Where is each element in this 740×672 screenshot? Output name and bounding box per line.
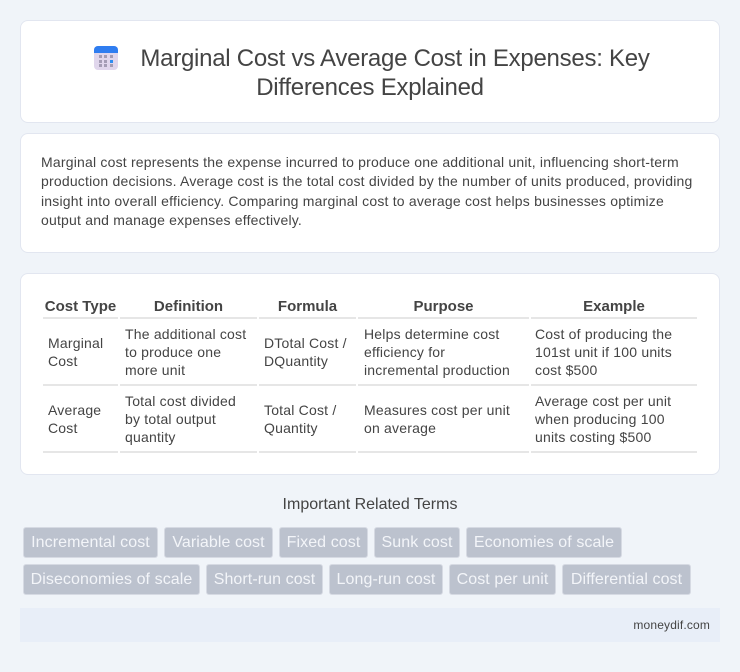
- text: introduction paragraph: production decisions. Average cost is the total cost divided by the number of units produced, providing: [41, 173, 692, 189]
- cell: marginal example: 101st unit if 100 units: [535, 344, 672, 360]
- tag: Diseconomies of scale: [23, 564, 200, 595]
- cell: marginal purpose: [364, 326, 510, 378]
- tag: Fixed cost: Fixed cost: [287, 534, 360, 551]
- tag: Cost per unit: Cost per unit: [457, 571, 548, 588]
- title: Differences Explained: [256, 74, 484, 101]
- tag: Sunk cost: [374, 527, 460, 558]
- text: introduction paragraph: insight into overall efficiency. Comparing marginal cost to average cost helps businesses optimize: [41, 193, 664, 209]
- cell: average example: Average cost per unit: [535, 393, 671, 409]
- text: introduction paragraph: [41, 154, 692, 228]
- cell: marginal purpose: efficiency for: [364, 344, 445, 360]
- cell: Average Cost: [48, 402, 101, 436]
- cell: marginal formula: DTotal Cost /: [264, 335, 347, 351]
- cell: average definition: by total output: [125, 411, 216, 427]
- cell: average example: when producing 100: [535, 411, 665, 427]
- tag: Long-run cost: Long-run cost: [337, 571, 435, 588]
- cell: average purpose: Measures cost per unit: [364, 402, 510, 418]
- cell: marginal purpose: incremental production: [364, 362, 510, 378]
- tag: Short-run cost: Short-run cost: [214, 571, 315, 588]
- cell: Marginal Cost: Cost: [48, 353, 78, 369]
- cell: marginal purpose: Helps determine cost: [364, 326, 500, 342]
- column heading: Purpose: Purpose: [413, 298, 474, 315]
- column heading: Cost Type: Cost Type: [45, 298, 116, 315]
- cell: average example: units costing $500: [535, 429, 651, 445]
- panel: introduction: [20, 133, 720, 253]
- cell: marginal definition: more unit: [125, 362, 185, 378]
- cell: average definition: quantity: [125, 429, 176, 445]
- cell: average purpose: on average: [364, 420, 436, 436]
- tag: Incremental cost: Incremental cost: [31, 534, 150, 551]
- cell: marginal definition: The additional cost: [125, 326, 246, 342]
- cell: marginal formula: [264, 335, 347, 369]
- column heading: Formula: Formula: [278, 298, 337, 315]
- cell: marginal formula: DQuantity: [264, 353, 328, 369]
- column heading: Definition: Definition: [154, 298, 223, 315]
- tag: Sunk cost: Sunk cost: [382, 534, 452, 551]
- footer bar: [20, 608, 720, 642]
- tag: Variable cost: [164, 527, 273, 558]
- cell: Marginal Cost: Marginal: [48, 335, 103, 351]
- tag: Long-run cost: [329, 564, 443, 595]
- tag: Economies of scale: Economies of scale: [474, 534, 614, 551]
- cell: marginal definition: to produce one: [125, 344, 221, 360]
- tag: Economies of scale: [466, 527, 622, 558]
- cell: average definition: Total cost divided: [125, 393, 236, 409]
- cell: Average Cost: Cost: [48, 420, 78, 436]
- title: Marginal Cost vs Average Cost in Expenses: Key: [140, 45, 650, 72]
- heading: related terms: Important Related Terms: [283, 496, 457, 513]
- tag: Cost per unit: [449, 564, 556, 595]
- cell: Average Cost: Average: [48, 402, 101, 418]
- cell: average formula: Quantity: [264, 420, 318, 436]
- cell: marginal example: Cost of producing the: [535, 326, 672, 342]
- tag: Fixed cost: [279, 527, 368, 558]
- cell: Marginal Cost: [48, 335, 103, 369]
- tag: Short-run cost: [206, 564, 323, 595]
- column heading: Example: Example: [583, 298, 645, 315]
- tag: Diseconomies of scale: Diseconomies of scale: [31, 571, 192, 588]
- cell: marginal example: cost $500: [535, 362, 598, 378]
- panel: comparison table: [20, 273, 720, 475]
- panel: header: [20, 20, 720, 123]
- cell: average formula: Total Cost /: [264, 402, 336, 418]
- icon: calendar: [94, 46, 118, 70]
- tag: Incremental cost: [23, 527, 158, 558]
- cell: average purpose: [364, 402, 510, 436]
- title: [140, 45, 650, 101]
- cell: average example: [535, 393, 671, 445]
- tag: Differential cost: [562, 564, 691, 595]
- cell: average formula: [264, 402, 336, 436]
- tag: Variable cost: Variable cost: [172, 534, 265, 551]
- tag: Differential cost: Differential cost: [571, 571, 682, 588]
- footer: site name: moneydif.com: [633, 618, 710, 632]
- cell: average definition: [125, 393, 236, 445]
- text: introduction paragraph: output and manage expenses effectively.: [41, 212, 302, 228]
- cell: marginal example: [535, 326, 672, 378]
- text: introduction paragraph: Marginal cost represents the expense incurred to produce one additional unit, influencing short-term: [41, 154, 679, 170]
- cell: marginal definition: [125, 326, 246, 378]
